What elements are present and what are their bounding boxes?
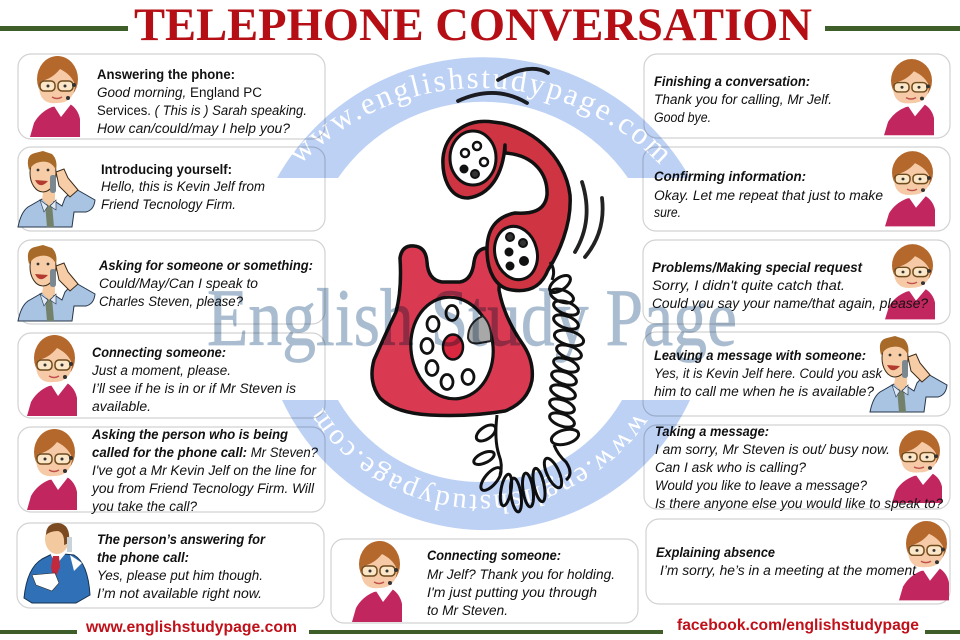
text: confirming information: Okay. Let me repeat that just to make bbox=[654, 188, 883, 203]
panel: introducing yourself bbox=[18, 147, 325, 231]
text: leaving a message bbox=[654, 348, 883, 399]
text: finishing a conversation: Thank you for calling, Mr Jelf. bbox=[654, 92, 832, 107]
text: the person answering bbox=[97, 532, 266, 601]
text: explaining absence: I’m sorry, he’s in a meeting at the moment bbox=[660, 563, 917, 578]
mouthpiece bbox=[489, 221, 543, 285]
text: connecting someone: I’ll see if he is in or if Mr Steven is bbox=[92, 381, 296, 396]
icon: woman with headset bbox=[884, 59, 934, 135]
ringing motion lines bbox=[458, 69, 603, 257]
panel: answering the phone bbox=[18, 54, 325, 139]
panel: taking a message bbox=[644, 424, 950, 511]
text: the person answering: the phone call: bbox=[97, 550, 189, 565]
panel: leaving a message bbox=[643, 332, 950, 416]
text: asking for someone: Charles Steven, please? bbox=[99, 294, 243, 309]
icon: man in blue suit bbox=[24, 523, 90, 603]
panel: connecting someone, bottom bbox=[331, 539, 638, 623]
text: connecting someone bottom: to Mr Steven. bbox=[427, 603, 508, 618]
text: connecting someone: Just a moment, please. bbox=[91, 363, 231, 378]
text: introducing yourself bbox=[101, 162, 265, 212]
text: problems and special requests bbox=[652, 260, 928, 311]
text: confirming information bbox=[654, 169, 883, 220]
icon: woman with headset bbox=[27, 335, 77, 416]
text: introducing yourself: Introducing yourself: bbox=[101, 162, 232, 177]
text: explaining absence bbox=[656, 545, 917, 578]
panel: problems and special requests bbox=[643, 240, 950, 324]
text: asking the person being called: Asking the person who is being bbox=[91, 427, 289, 442]
text: problems and special requests: Could you say your name/that again, please? bbox=[652, 296, 928, 311]
text: connecting someone bottom: Mr Jelf? Thank you for holding. bbox=[427, 567, 615, 582]
text: taking a message: Is there anyone else you would like to speak to? bbox=[655, 496, 943, 511]
text: asking the person being called: I've got a Mr Kevin Jelf on the line for bbox=[92, 463, 316, 478]
text: asking for someone: Asking for someone or something: bbox=[98, 258, 313, 273]
footer: website address: www.englishstudypage.com bbox=[85, 619, 297, 636]
text: connecting someone: Connecting someone: bbox=[92, 345, 226, 360]
text: confirming information: sure. bbox=[654, 205, 681, 220]
text: connecting someone bottom: I'm just putting you through bbox=[427, 585, 597, 600]
icon: woman with headset bbox=[27, 429, 77, 510]
text: finishing a conversation: Finishing a conversation: bbox=[654, 74, 810, 89]
text: the person answering: The person’s answering for bbox=[97, 532, 266, 547]
panel: connecting someone bbox=[18, 333, 325, 418]
icon: woman with headset bbox=[899, 521, 949, 600]
footer: facebook address: facebook.com/englishstudypage bbox=[677, 617, 919, 634]
handset bbox=[443, 121, 570, 291]
text: problems and special requests: Problems/Making special request bbox=[652, 260, 862, 275]
text: taking a message: Would you like to leave a message? bbox=[655, 478, 867, 493]
text: leaving a message: him to call me when he is available? bbox=[654, 384, 874, 399]
decorative footer rules bbox=[0, 630, 960, 634]
text: asking the person being called: you from Friend Tecnology Firm. Will bbox=[91, 481, 315, 496]
text: taking a message: Can I ask who is calling? bbox=[655, 460, 806, 475]
icon: man on phone bbox=[870, 336, 947, 412]
text: connecting someone bbox=[91, 345, 296, 414]
panel: the person answering bbox=[17, 523, 324, 608]
text: taking a message bbox=[655, 424, 943, 511]
text: finishing a conversation: Good bye. bbox=[654, 110, 711, 125]
decorative title rules bbox=[0, 26, 960, 31]
watermark top arc: www.englishstudypage.com bbox=[292, 68, 668, 164]
panel: explaining absence bbox=[646, 519, 950, 604]
icon: woman with headset bbox=[30, 56, 80, 137]
icon: woman with headset bbox=[352, 541, 402, 622]
text: answering the phone: Good morning, England PC bbox=[97, 85, 262, 100]
text: confirming information: Confirming information: bbox=[654, 169, 806, 184]
panel: finishing a conversation bbox=[644, 54, 950, 138]
icon: man on phone bbox=[18, 151, 95, 227]
watermark bottom arc: www.englishstudypage.com bbox=[314, 408, 648, 514]
icon: woman with headset bbox=[885, 244, 935, 319]
rotary dial bbox=[404, 292, 500, 404]
text: answering the phone: How can/could/may I help you? bbox=[97, 121, 290, 136]
text: answering the phone bbox=[97, 67, 307, 136]
text: connecting someone bottom: Connecting someone: bbox=[427, 548, 561, 563]
text: the person answering: Yes, please put him though. bbox=[97, 568, 263, 583]
text: taking a message: I am sorry, Mr Steven is out/ busy now. bbox=[655, 442, 890, 457]
earpiece bbox=[450, 131, 496, 185]
icon: woman with headset bbox=[892, 430, 942, 503]
text: leaving a message: Leaving a message with someone: bbox=[654, 348, 866, 363]
text: problems and special requests: Sorry, I didn't quite catch that. bbox=[652, 278, 845, 293]
text: connecting someone: available. bbox=[92, 399, 151, 414]
panel: asking the person being called bbox=[18, 427, 325, 514]
panel: asking for someone or something bbox=[18, 240, 325, 324]
icon: man on phone bbox=[18, 245, 95, 321]
panel: confirming information bbox=[643, 147, 950, 231]
text: asking for someone: Could/May/Can I speak to bbox=[99, 276, 258, 291]
coiled cord bbox=[472, 262, 585, 513]
watermark: website arcs and name bbox=[207, 57, 737, 530]
text: answering the phone: Answering the phone: bbox=[97, 67, 235, 82]
text: asking the person being called: called for the phone call: Mr Steven? bbox=[92, 445, 318, 460]
text: leaving a message: Yes, it is Kevin Jelf here. Could you ask bbox=[654, 366, 883, 381]
text: answering the phone: Services. ( This is ) Sarah speaking. bbox=[97, 103, 307, 118]
illustration: red rotary telephone bbox=[372, 69, 603, 513]
text: asking the person being called bbox=[91, 427, 318, 514]
watermark name: English Study Page bbox=[207, 272, 737, 363]
text: asking the person being called: you take the call? bbox=[91, 499, 197, 514]
text: asking for someone bbox=[98, 258, 313, 309]
title: TELEPHONE CONVERSATION bbox=[134, 0, 812, 51]
text: connecting someone bottom bbox=[427, 548, 615, 618]
text: introducing yourself: Hello, this is Kevin Jelf from bbox=[101, 179, 265, 194]
text: the person answering: I’m not available right now. bbox=[97, 586, 262, 601]
text: finishing a conversation bbox=[654, 74, 832, 125]
text: explaining absence: Explaining absence bbox=[656, 545, 775, 560]
text: taking a message: Taking a message: bbox=[655, 424, 769, 439]
telephone base bbox=[372, 246, 532, 416]
icon: woman with headset bbox=[885, 151, 935, 226]
text: introducing yourself: Friend Tecnology Firm. bbox=[101, 197, 236, 212]
